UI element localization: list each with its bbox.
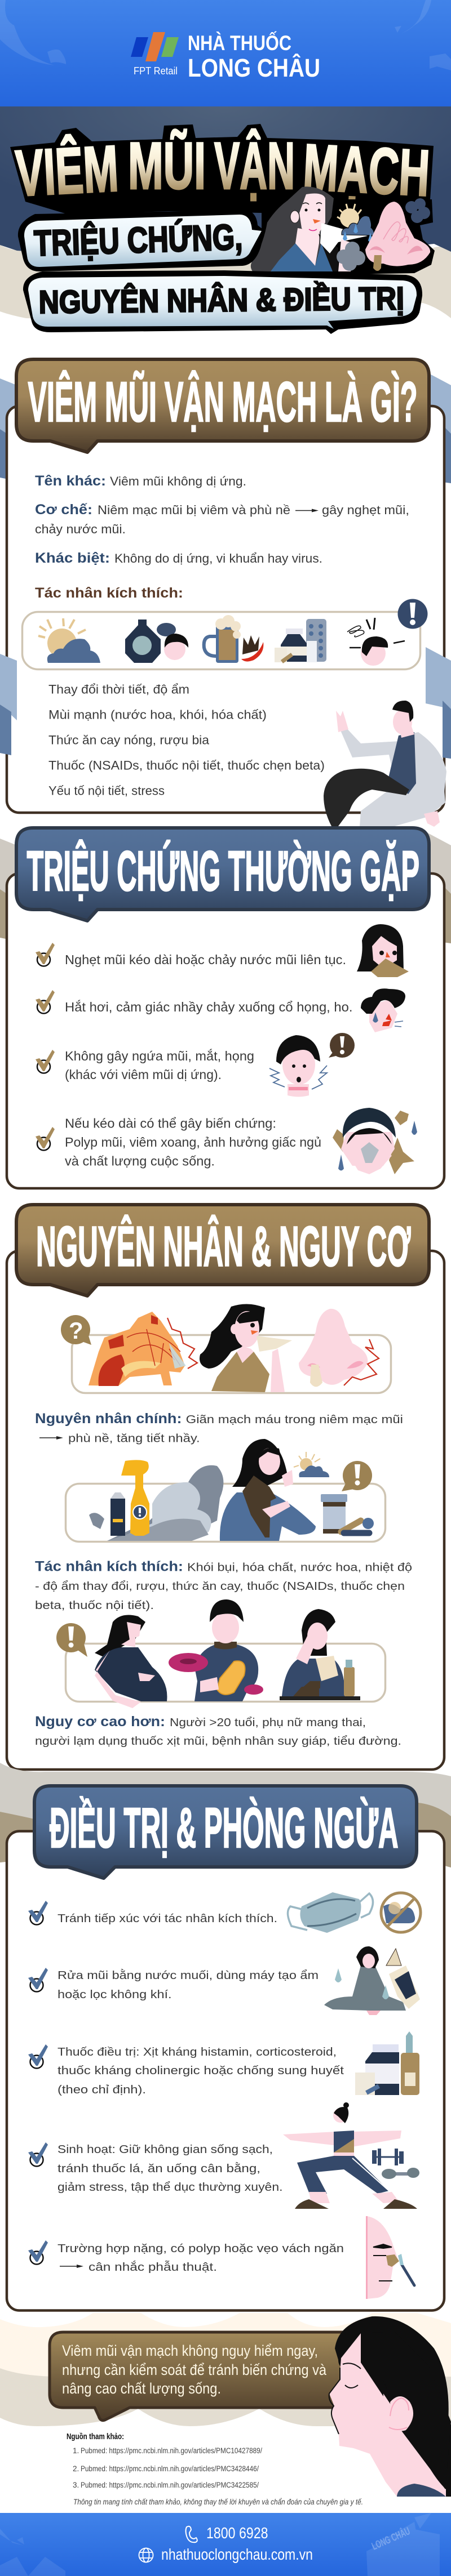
closing speech bubble: Viêm mũi vận mạch không nguy hiểm ngay, <box>62 2342 318 2359</box>
logo wordmark: LONG CHÂU <box>188 54 320 82</box>
panel: treatment <box>7 1831 444 2310</box>
icon: woman blocked nose <box>357 924 409 977</box>
text: higher risk <box>35 1714 401 1748</box>
text: main cause: Nguyên nhân chính: <box>35 1411 182 1427</box>
icon: man sneezing <box>361 988 405 1032</box>
subtitle bubble: TRIỆU CHỨNG: TRIỆU CHỨNG, <box>33 216 243 264</box>
trigger list: Thay đổi thời tiết, độ ẩm <box>48 683 189 696</box>
section 1 background stripes <box>0 372 451 483</box>
woman ear <box>290 211 299 223</box>
text: triggers <box>35 1559 412 1612</box>
illustration: exercise <box>283 2102 419 2209</box>
treatment 3: (theo chỉ định). <box>58 2083 146 2096</box>
header band <box>0 0 451 106</box>
woman neck <box>295 228 320 266</box>
closing background waves <box>0 2313 451 2426</box>
symptom 3: Không gây ngứa mũi, mắt, họng <box>65 1049 254 1063</box>
gray cloud <box>337 242 365 271</box>
references: 1. <box>73 2446 79 2455</box>
footer band <box>0 2513 451 2576</box>
illustration box 3 <box>56 1599 386 1708</box>
treatment 4: tránh thuốc lá, ăn uống cân bằng, <box>58 2162 260 2175</box>
references: 3. <box>73 2481 79 2489</box>
woman with tweezers <box>280 1609 360 1700</box>
icon: question bubble <box>61 1315 91 1345</box>
trigger list: Yếu tố nội tiết, stress <box>48 784 165 797</box>
definition: difference: Khác biệt: <box>35 550 110 566</box>
pants <box>324 769 409 826</box>
symptom 2 <box>36 990 353 1014</box>
treatment 2: hoặc lọc không khí. <box>58 1988 172 2001</box>
hero background <box>0 106 451 324</box>
icon: beer and chili <box>204 615 263 663</box>
neck <box>399 727 414 738</box>
woman eyes and nose <box>303 203 322 231</box>
definition: other name: Viêm mũi không dị ứng. <box>110 474 246 488</box>
treatment 4 <box>28 2142 283 2194</box>
symptom 4: Polyp mũi, viêm xoang, ảnh hưởng giấc ngủ <box>65 1135 321 1149</box>
treatment 1 <box>28 1901 277 1925</box>
icon: medicines <box>275 619 326 662</box>
head <box>393 710 412 734</box>
subtitle bubble: NGUYÊN NHÂN & ĐIỀU TRỊ: NGUYÊN NHÂN & ĐIỀU TRỊ <box>38 280 404 320</box>
heading: what is it <box>16 359 429 452</box>
hair <box>392 701 413 722</box>
section 2 background stripes <box>0 832 451 943</box>
definition: mechanism: chảy nước mũi. <box>35 522 126 536</box>
sun and cloud <box>337 204 374 242</box>
nasal anatomy <box>89 1312 197 1386</box>
triggers heading: Tác nhân kích thích: <box>35 585 183 601</box>
hero title sticker <box>10 124 434 215</box>
trigger list: Thức ăn cay nóng, rượu bia <box>48 733 210 747</box>
definition: mechanism: gây nghẹt mũi, <box>322 503 409 517</box>
snot <box>373 255 382 271</box>
treatment 5: Trường hợp nặng, có polyp hoặc vẹo vách ngăn <box>58 2242 344 2255</box>
text: higher risk: người lạm dụng thuốc xịt mũi, bệnh nhân suy giáp, tiểu đường. <box>35 1735 401 1748</box>
medicine jar and pills <box>321 1494 374 1534</box>
symptom 4: Nếu kéo dài có thể gây biến chứng: <box>65 1116 276 1131</box>
small weather icon <box>294 1452 329 1477</box>
woman face <box>299 194 325 235</box>
illustration: nasal rinse <box>324 1946 420 2015</box>
website: nhathuoclongchau.com.vn <box>161 2546 313 2563</box>
icon: exclamation bubble <box>329 1033 355 1058</box>
symptom 3 <box>36 1049 254 1082</box>
section 4 background band <box>0 1763 451 1868</box>
illustration: surgery face <box>366 2216 414 2299</box>
panel: causes <box>7 1251 444 1770</box>
treatment 3: Thuốc điều trị: Xịt kháng histamin, corticosteroid, <box>58 2045 337 2058</box>
logo wordmark: NHÀ THUỐC <box>188 31 291 55</box>
icon: question bubble: ? <box>69 1317 83 1344</box>
treatment 3: thuốc kháng cholinergic hoặc chống sung huyết <box>58 2064 344 2077</box>
ill man with diabetes meter <box>169 1599 263 1701</box>
subtitle bubble: NGUYÊN NHÂN & ĐIỀU TRỊ <box>23 270 422 334</box>
closing speech bubble: nhưng cần kiểm soát để tránh biến chứng và <box>62 2361 327 2378</box>
definition: mechanism: Niêm mạc mũi bị viêm và phù nề <box>98 503 290 517</box>
spray bottles <box>89 1460 149 1536</box>
references: 2. <box>73 2464 79 2473</box>
treatment 3 <box>28 2044 344 2096</box>
character: woman profile <box>329 2316 451 2497</box>
text: higher risk: Nguy cơ cao hơn: <box>35 1714 165 1730</box>
phone number: 1800 6928 <box>206 2524 268 2542</box>
character: man sitting <box>324 701 446 827</box>
hero title sticker: VIÊM <box>14 132 120 210</box>
logo: FPT Retail: FPT Retail <box>134 65 178 77</box>
exclamation bubble <box>342 1461 372 1491</box>
references: Pubmed: https://pmc.ncbi.nlm.nih.gov/articles/PMC3422585/ <box>81 2481 259 2489</box>
definition: mechanism: Cơ chế: <box>35 502 92 518</box>
symptom 2: Hắt hơi, cảm giác nhầy chảy xuống cổ họng, ho. <box>65 1000 353 1014</box>
heading: treatment <box>34 1786 417 1878</box>
hero illustration: woman with tissue and nose <box>251 186 435 276</box>
profile line <box>329 2368 340 2434</box>
text: triggers: Tác nhân kích thích: <box>35 1559 183 1575</box>
trigger list <box>48 683 325 797</box>
treatment 2: Rửa mũi bằng nước muối, dùng máy tạo ẩm <box>58 1969 319 1982</box>
heading: causes <box>16 1205 429 1296</box>
tissue <box>320 223 368 253</box>
text: higher risk: Người >20 tuổi, phụ nữ mang thai, <box>170 1716 366 1729</box>
text: triggers: Khói bụi, hóa chất, nước hoa, nhiệt độ <box>187 1561 412 1574</box>
gray leg <box>360 777 445 826</box>
logo: FPT Retail <box>131 32 179 77</box>
jacket <box>319 234 338 271</box>
nose scribble <box>383 222 408 243</box>
text: main cause <box>35 1411 403 1445</box>
hair <box>335 2316 451 2497</box>
icon: no weather <box>381 1893 421 1932</box>
ear <box>390 2396 413 2431</box>
pregnant woman <box>95 1615 167 1708</box>
icon: face with throat <box>269 1035 327 1097</box>
hand <box>338 239 354 271</box>
trigger list: Mùi mạnh (nước hoa, khói, hóa chất) <box>48 707 267 722</box>
treatment 4: Sinh hoạt: Giữ không gian sống sạch, <box>58 2143 273 2156</box>
references: Nguồn tham khảo: <box>67 2432 124 2441</box>
symptom 1 <box>36 943 346 967</box>
nostrils <box>369 246 423 255</box>
hero title sticker: MŨI <box>128 129 206 203</box>
shirt <box>388 732 416 794</box>
text: main cause: Giãn mạch máu trong niêm mạc mũi <box>186 1413 403 1426</box>
icon: stressed head <box>347 618 405 666</box>
watermark text: LONG CHÂU <box>370 2525 412 2553</box>
woman sneezing <box>200 1304 292 1392</box>
trigger list: Thuốc (NSAIDs, thuốc nội tiết, thuốc chẹn beta) <box>48 758 325 773</box>
icon: face <box>164 639 185 660</box>
icon: sneezing person in beanie <box>333 1108 417 1174</box>
illustration: medicine <box>355 2031 419 2095</box>
illustration box 2 <box>65 1439 386 1542</box>
lower hand <box>424 811 440 827</box>
closing speech bubble: nâng cao chất lượng sống. <box>62 2380 221 2397</box>
closing speech bubble <box>50 2332 361 2421</box>
arm and jacket <box>341 727 446 803</box>
shirt <box>397 2484 446 2497</box>
treatment 5: cân nhắc phẫu thuật. <box>89 2261 217 2274</box>
big nose with discharge <box>299 1309 379 1387</box>
references: Pubmed: https://pmc.ncbi.nlm.nih.gov/articles/PMC3428446/ <box>81 2464 259 2473</box>
definition: difference <box>35 550 322 566</box>
text: triggers: beta, thuốc nội tiết). <box>35 1599 154 1612</box>
definition: difference: Không do dị ứng, vi khuẩn hay virus. <box>114 551 322 565</box>
exclamation bubble <box>56 1623 87 1657</box>
logo wordmark <box>188 31 320 82</box>
subtitle bubble: TRIỆU CHỨNG <box>18 210 265 271</box>
smoke cloud <box>107 1465 223 1541</box>
treatment 2 <box>28 1968 319 2001</box>
hair lock <box>361 2332 451 2489</box>
hand <box>336 711 348 732</box>
definition: mechanism <box>35 502 409 536</box>
icon: weather <box>38 618 100 663</box>
definition: other name <box>35 473 246 489</box>
illustration box 1 <box>61 1304 391 1393</box>
symptom 1: Nghẹt mũi kéo dài hoặc chảy nước mũi liên tục. <box>65 952 346 967</box>
face and neck <box>329 2333 446 2497</box>
section 3 background stripes <box>0 647 451 759</box>
woman coughing <box>220 1439 316 1541</box>
treatment 1: Tránh tiếp xúc với tác nhân kích thích. <box>58 1912 277 1925</box>
symptom 4: và chất lượng cuộc sống. <box>65 1153 215 1168</box>
definition: other name: Tên khác: <box>35 473 106 489</box>
triggers icon box <box>23 612 421 669</box>
symptom 4 <box>36 1116 321 1168</box>
hero title sticker: VẬN <box>214 128 295 203</box>
references: Pubmed: https://pmc.ncbi.nlm.nih.gov/articles/PMC10427889/ <box>81 2446 262 2455</box>
text: triggers: - độ ẩm thay đổi, rượu, thức ăn cay, thuốc (NSAIDs, thuốc chẹn <box>35 1580 405 1593</box>
treatment 5 <box>28 2240 344 2274</box>
text: main cause: phù nề, tăng tiết nhầy. <box>68 1432 200 1445</box>
icon: exclamation badge <box>398 599 427 629</box>
icon: mask <box>288 1892 373 1933</box>
navy cloud <box>405 198 430 223</box>
woman hair <box>251 186 334 271</box>
references: Thông tin mang tính chất tham khảo, không thay thế lời khuyên và chẩn đoán của chuyên gia y tế. <box>73 2498 363 2506</box>
treatment 4: giảm stress, tập thể dục thường xuyên. <box>58 2181 283 2194</box>
icon: perfume <box>125 620 188 663</box>
big nose <box>365 202 430 266</box>
icon: phone <box>186 2526 197 2542</box>
panel: what is it <box>7 406 444 813</box>
footer watermark <box>0 2513 440 2576</box>
references <box>67 2432 363 2506</box>
panel: symptoms <box>7 873 444 1188</box>
necklace band <box>420 2421 443 2442</box>
heading: symptoms <box>16 828 429 921</box>
symptom 3: (khác với viêm mũi dị ứng). <box>65 1067 222 1082</box>
icon: globe <box>139 2548 153 2562</box>
eyebrow and eye <box>343 2363 361 2388</box>
woman shirt <box>271 243 334 271</box>
